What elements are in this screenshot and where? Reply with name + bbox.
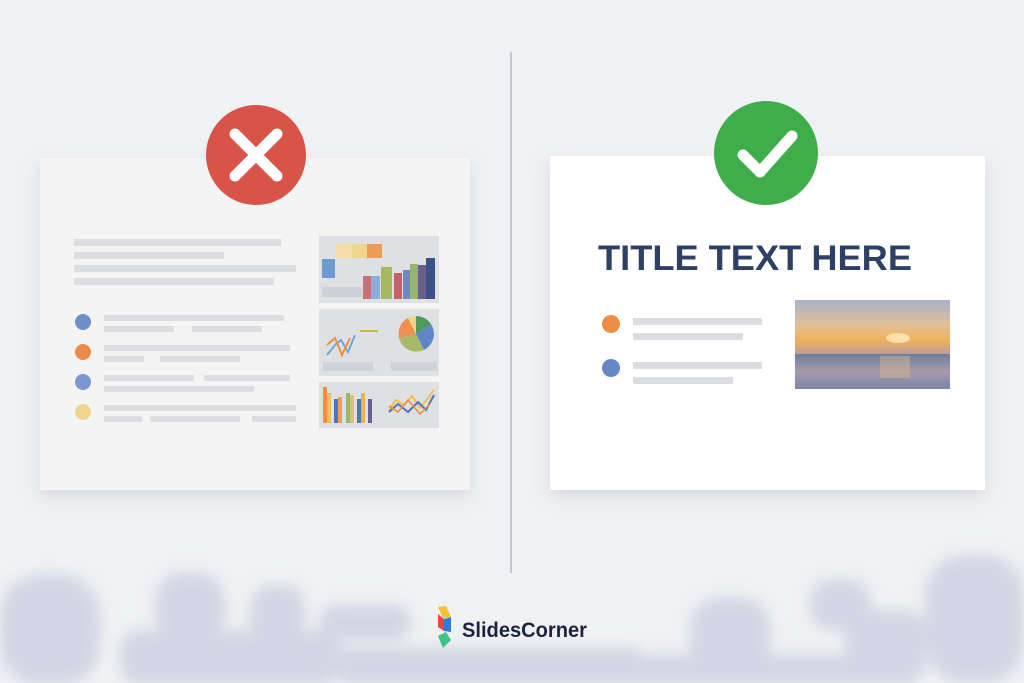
icon: green check <box>714 101 818 205</box>
chart: pie and lines <box>319 309 439 376</box>
bullet list <box>75 314 296 422</box>
text lines <box>74 239 296 285</box>
background audience silhouettes <box>0 555 1024 683</box>
logo: SlidesCorner: SlidesCorner <box>462 619 587 642</box>
icon: red cross <box>206 105 306 205</box>
title text: TITLE TEXT HERE <box>598 239 912 278</box>
bullet list <box>602 315 762 384</box>
divider line <box>510 52 512 573</box>
panel: bad slide <box>40 158 470 490</box>
logo: SlidesCorner <box>438 606 587 648</box>
photo: sunset <box>795 300 950 389</box>
chart: bar chart <box>319 236 439 303</box>
chart: bars and lines <box>319 382 439 428</box>
panel: good slide <box>550 156 985 490</box>
